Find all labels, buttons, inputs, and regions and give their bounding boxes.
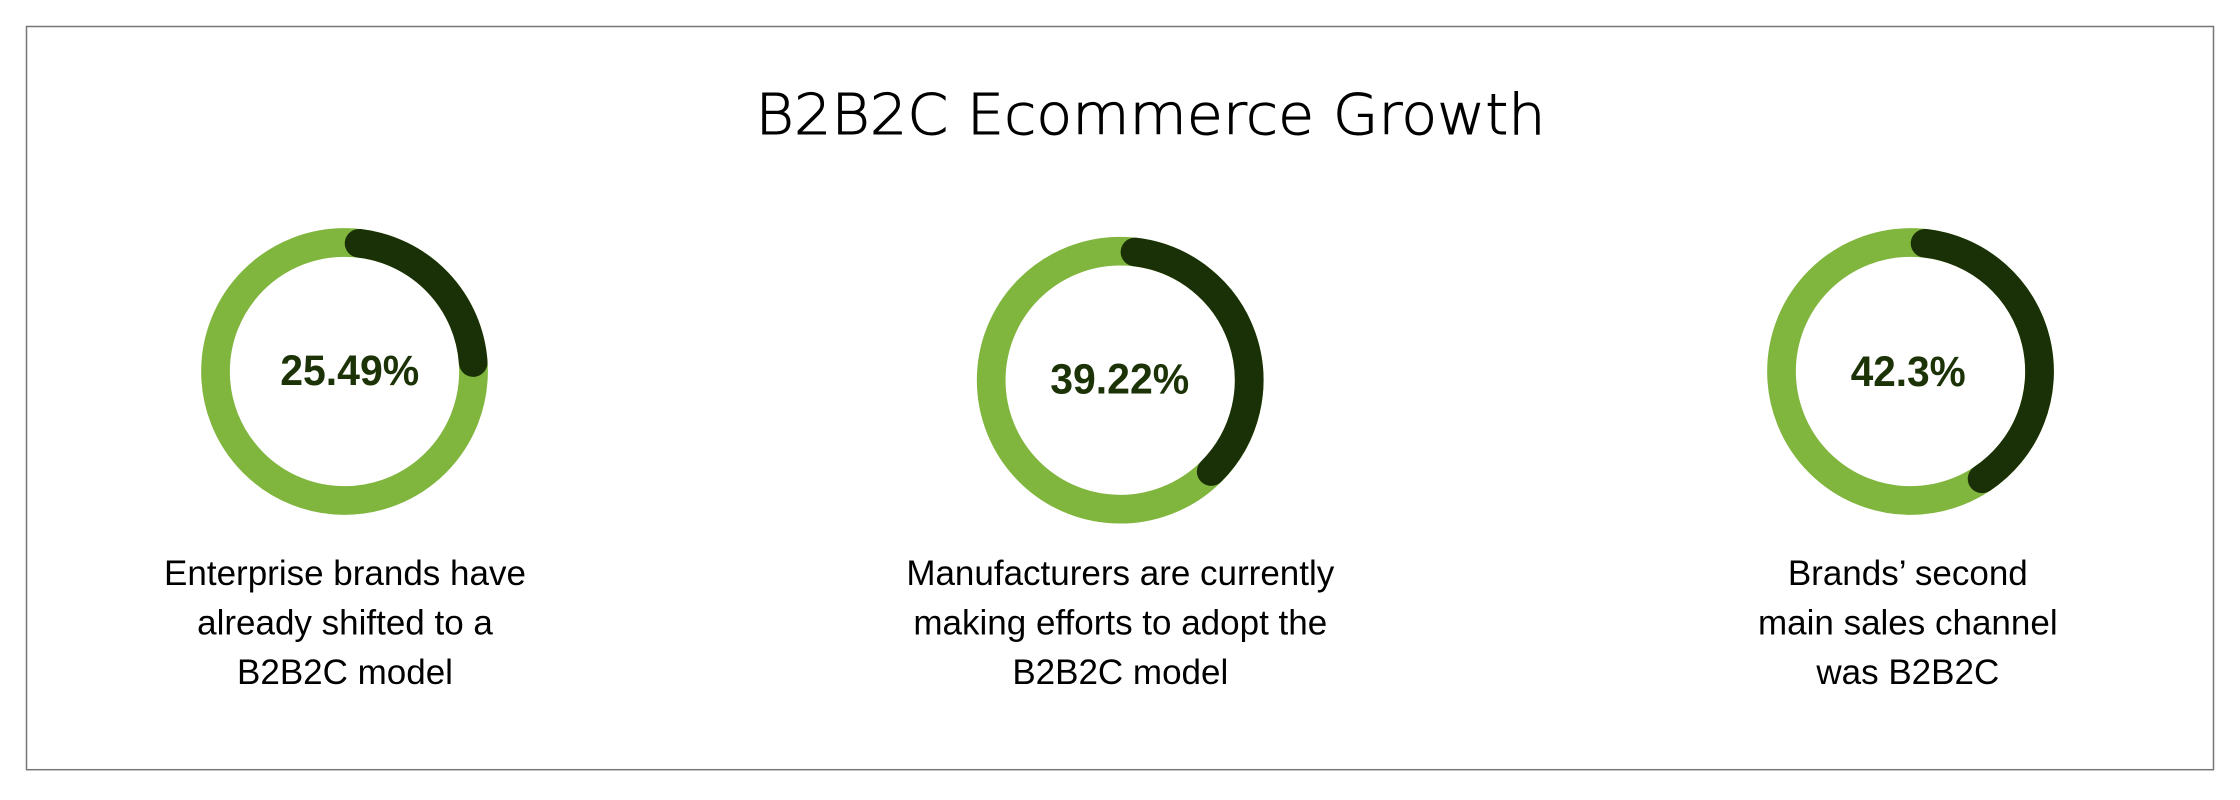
caption: main sales channel [1758, 604, 2058, 642]
caption: Brands’ second [1788, 554, 2028, 593]
stat value: 39.22% [1050, 356, 1189, 403]
panel: enterprise brands stat [164, 242, 526, 692]
caption [1758, 554, 2058, 692]
stat value: 42.3% [1851, 349, 1966, 396]
caption: B2B2C model [237, 653, 453, 692]
caption: B2B2C model [1012, 653, 1228, 692]
panel: sales channel stat [1758, 242, 2058, 692]
caption [164, 554, 526, 692]
caption: making efforts to adopt the [913, 604, 1327, 642]
donut chart: 39.22% [991, 251, 1249, 509]
caption [906, 554, 1335, 692]
caption: already shifted to a [197, 604, 493, 642]
stat value: 25.49% [280, 348, 419, 395]
caption: was B2B2C [1815, 653, 1999, 692]
caption: Enterprise brands have [164, 554, 526, 593]
donut chart: 25.49% [216, 242, 474, 500]
title: B2B2C Ecommerce Growth [756, 83, 1546, 148]
donut chart: 42.3% [1782, 242, 2040, 500]
caption: Manufacturers are currently [906, 554, 1335, 593]
panel: manufacturers stat [906, 251, 1335, 692]
